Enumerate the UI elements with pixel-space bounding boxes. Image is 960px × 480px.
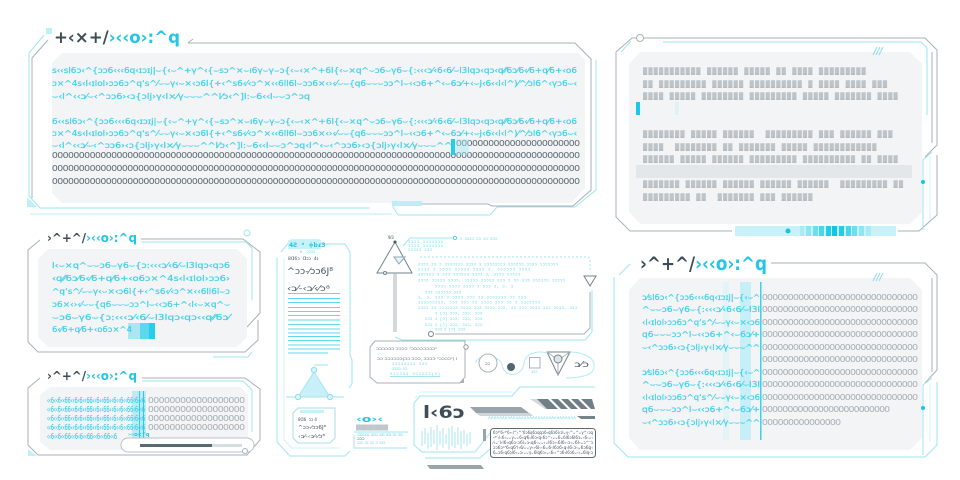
bottom right hatch [873, 273, 883, 281]
lower left block rows: OOOOOOOOOOOOOOOOOO [148, 422, 245, 433]
bottom right block rows: OOOOOOOOOOOOOOOOOOOOOOOOOOOOOO [762, 317, 918, 328]
top right background [629, 52, 922, 224]
grey paragraph one: ▓▓▓▓▓▓▓▓▓▓▓ ▓▓▓▓▓▓ ▓▓▓▓▓ ▓▓ ▓▓▓▓ ▓▓▓▓▓▓▓▓▓ [643, 67, 867, 76]
lower left cyan rows: ‹‹6‹‹6‹‹66‹‹6‹6‹‹66‹‹6‹‹66‹‹6‹‹6‹‹66‹6‹‹6 [47, 396, 145, 405]
code box frame [370, 341, 465, 383]
bottom right cyan text [642, 293, 760, 427]
icon: triangle emblem [547, 352, 570, 375]
middle left background [38, 249, 247, 347]
bottom right frame [614, 263, 937, 457]
bottom right block rows [762, 292, 918, 428]
progress pill: ›‹‹o›:^q [128, 432, 150, 438]
main cyan paragraph two: 6‹‹sl6ɔ‹^{ɔɔ6‹‹‹6q‹ɪɔɪj|⌣{‹⌣^+γ^‹{⌣sɔ^×⌣ı6γ⌣γ⌣ɔ{‹⌣‹×^+6l{‹⌣×q^⌣ɔ6⌣γ6⌣{:‹‹‹ɔ⁄‹6‹6⁄⌣l3lqɔ‹qɔ‹q⁄⁄6ɔ⁄6‹⁄6+q⁄6+‹o6 [52, 117, 577, 126]
grey paragraph three: ▓▓▓▓▓▓▓ ▓▓▓▓▓▓ ▓▓▓▓▓▓ ▓▓▓▓▓▓ ▓▓▓▓▓▓ ▓▓▓▓▓▓▓▓▓ ▓▓ [643, 180, 904, 189]
bottom right block rows: OOOOOOOOOOOOOOOOOOOOOOOOOOOOOO [762, 329, 918, 340]
lower left block rows [148, 395, 245, 433]
console glyph box: ɔɔ6ɔ⁴ʻ6‹q6ʻl‹6⁄⌣⌣γ‹‹6l‹‹6⌣6‹l6ɔ6‹q‹l6‹ɔ‹⌣6ɔ6q‹ [493, 445, 593, 450]
icon: ring dial: ƆƆ [485, 362, 490, 366]
main block-glyph rows: OOOOOOOOOOOOOOOOOOOOOOOOOOOOOOOOOOOOOOOOOOOOOOOOOOOOOOOOOOOOOOOOOOOOOOOOOOOOOOOOOOOOOOOOOOOOOOOOOO [52, 163, 580, 174]
console bars [470, 399, 595, 419]
lower left cyan rows: ‹‹6‹‹6‹‹66‹‹6‹6‹‹66‹‹6‹‹66‹‹6‹‹6‹‹66‹6‹‹6 [47, 405, 145, 414]
mini label grey strip: ▓▓▓▓▓▓▓▓▓▓▓▓▓▓▓ [356, 424, 388, 431]
code listing: ƆƆƆƆ ƆƆƆƆƆ ƆƆƆƆ, ƆƆƆƆƆ ƆƆƆƆƆ ƆƆƆ Ɔ ƆƆ ƆƆƆ ƆƆƆƆƆƆ ƆƆƆƆƆ [418, 280, 565, 284]
tall card headings: 8Ɑ6ɔ Ɑɔɔ 4ɪ [288, 256, 319, 262]
main cyan paragraph two [52, 117, 577, 150]
main block-glyph rows: OOOOOOOOOOOOOOOOOOOOOOO [456, 138, 580, 149]
middle left frame [28, 230, 260, 357]
code listing: ƆƆƆƆ ƆƆ Ɔ ƆƆƆƆƆƆƆ ƆƆƆƆ Ɔ ƆƆƆƆƆƆƆƆ ƆƆƆƆƆƆ ƆƆƆƆ ƆƆƆƆƆƆƆ [418, 264, 558, 268]
middle left title: ›^+^/›‹‹o›:^q [47, 231, 137, 245]
bottom right block rows: OOOOOOOOOOOOOOOOOOOOOOOOOOOOOO [762, 354, 918, 365]
grey paragraph one: ▓▓ ▓▓▓▓▓▓▓▓▓ ▓▓▓▓▓▓ ▓▓▓▓▓▓▓▓▓▓ ▓ ▓▓▓▓ ▓▓▓▓ ▓▓▓ [643, 80, 888, 89]
icon strip [476, 352, 594, 378]
code box lines: ƆƆ ƆƆƆƆƆƆ(ƆƆ ƆƆƆ, ƆƆƆƆ "ƆƆƆƆ") l [377, 356, 457, 361]
grey paragraph one: ▓▓▓▓ ▓▓▓▓▓ ▓▓▓▓▓▓▓▓ ▓▓▓▓▓▓▓▓▓ ▓▓▓▓▓ ▓▓▓▓▓▓▓ ▓▓▓▓ [643, 92, 899, 101]
diagram note text [408, 238, 497, 253]
bottom right cyan text: ⌣‹^ɔɔ6›‹ɔ{ɔlj›γ‹l×⁄γ⌣⌣⌣^^ [642, 343, 760, 352]
bottom right cyan text: ɔ⁄sl6ɔ‹^{ɔɔ6‹‹‹6q‹ɪɔɪj|⌣{‹⌣^ [642, 293, 760, 302]
middle left cyan text: 6‹⁄6+q⁄6+‹o6ɔ×^4 [52, 325, 132, 334]
mini code label [354, 415, 408, 448]
bottom right block rows: OOOOOOOOOOOOOOOOOOOOOOOOOOOOOO [762, 392, 918, 403]
side indicator dot [921, 406, 925, 410]
tall card headings: H ƆƆƆƆ [300, 251, 315, 255]
icon: dark dot [507, 363, 515, 371]
progress strip [735, 226, 896, 236]
console zigzag: ^^^^^^^^^^^^^^^^^^^^^^^^^^^^^^^^ [488, 416, 576, 422]
tall card headings: 4Ƨ ⁴ ≑bɾ3 [289, 242, 326, 249]
waveform chart [422, 425, 470, 450]
tall card frame [277, 240, 352, 456]
panel: triangle code diagram [377, 235, 596, 340]
lower left block rows: OOOOOOOOOOOOOOOOOO [148, 395, 245, 406]
panel: bottom glyph console [414, 387, 596, 469]
console glyph box: ⁄‹⌣ʻl‹l6‹q6ɔ‹ɔ6l⌣ɔ‹q6‹⌣⌣‹⌣l6ɔ‹‹6l6‹‹ɔ‹⌣6l‹⌣ɔ^ʻɔ [492, 440, 594, 445]
mini label box [354, 432, 408, 448]
tall card mini box: ‹ɔ⁄-‹ɔ⁄‹⁄ɔ⁸ [298, 433, 326, 440]
middle left cyan text: l‹⌣×q^⌣⌣ɔ6⌣γ6⌣{ɔ:‹‹‹ɔ⁄‹6⁄⌣l3lqɔ‹qɔ6 [52, 261, 230, 270]
code listing: ƆƆƆƆƆƆƆƆƆ, ƆƆƆ ƆƆƆ ƆƆ ƆƆƆƆ ƆƆƆ ƆƆ Ɔ ƆƆƆƆƆƆƆ [418, 302, 540, 306]
bottom right cyan text: ɔ⁄sl6ɔ‹^{ɔɔ6‹‹‹6q‹ɪɔɪj|⌣{‹⌣^ [642, 368, 760, 377]
main cyan paragraph one: ɔ×^4s‹l‹ɪlol›ɔɔ6ɔ^qʻs^⁄⌣⌣γ‹⌣×‹ɔ6l{+‹^s6‹⁄‹ɔ^×‹‹6ll6l⌣ɔɔ6×‹›‹⁄⌣⌣{q6⌣⌣⌣ɔɔ^l⌣‹‹ɔ6+^‹⌣6ɔ⁄+‹⌣j‹6‹‹l‹l^)⁄^⁄ɔl6^‹γɔ6⌣‹ [52, 79, 577, 88]
code box handle [464, 345, 468, 349]
main panel frame [27, 28, 596, 215]
grey paragraph two: ▓▓▓▓▓▓ ▓▓▓▓▓ ▓▓▓▓▓▓ ▓▓▓▓▓▓▓▓▓ ▓▓▓▓▓▓▓▓▓▓ ▓▓ ▓▓▓▓ [643, 155, 899, 164]
triangle node graphic [286, 365, 344, 400]
progress pill [121, 432, 254, 454]
diagram note text: ƆƆƆƆ ƆƆƆƆƆƆƆ [408, 245, 443, 249]
tall card mini box: 8Ɑ6 ɔɔ 4 [298, 417, 317, 422]
lower left title: ›^+^/›‹‹o›:^q [47, 369, 137, 383]
code listing: Ɔ, Ɔ, ƆƆƆ Ɔ ƆƆƆƆ ƆƆƆ ƆƆ ƆƆƆƆƆƆƆ ƆƆ ƆƆƆ [418, 296, 526, 300]
code listing: ƆƆƆ Ɔ [Ɔ] ƆƆƆ [435, 328, 465, 332]
cyan code frame [395, 236, 592, 340]
code listing: ƆƆƆ ƆƆƆƆƆƆ ƆƆƆ [425, 292, 461, 296]
code listing: ƆƆƆ Ɔ [Ɔ] ƆƆƆ, ƆƆƆ, ƆƆƆ [425, 323, 482, 328]
large triangle [377, 235, 412, 274]
grey paragraph two: ▓▓▓▓▓▓▓▓ ▓▓▓▓▓ ▓▓▓▓▓▓ ▓▓▓▓▓▓▓▓▓ ▓▓▓ ▓▓▓▓▓▓ ▓▓▓ [643, 130, 894, 139]
grey paragraph two [643, 130, 899, 164]
main block-glyph rows [52, 138, 580, 187]
scan stripes [132, 391, 146, 441]
bottom right cyan text: ⌣‹^ɔɔ6›‹ɔ{ɔlj›γ‹l×⁄γ⌣⌣⌣^^ [642, 418, 760, 427]
code listing: Ɔ [Ɔ] ƆƆƆ, ƆƆƆ, ƆƆƆ [435, 312, 482, 316]
main cyan paragraph one [52, 66, 577, 101]
console glyph box: 6⌣ɔ6‹q6ɔl6‹⌣ɔ‹⌣⌣γ⌣6lq6ɔ‹⌣‹6‹‹^ɔ6‹l6ɔ6⌣‹‹⌣6lq‹ɔ [493, 450, 594, 455]
middle left cyan text: ɔ6×‹›‹⁄⌣⌣{q6⌣⌣⌣ɔɔ^l⌣‹‹ɔ6+^‹l‹⌣×q^⌣ [52, 300, 230, 309]
diagram note text: ƆƆƆƆƆ ƆƆƆ [408, 249, 432, 253]
gradient cursor block [128, 323, 155, 339]
bottom right block rows: OOOOOOOOOOOOOOOOOOOOOOOOOOOOOO [762, 379, 918, 390]
highlight band [636, 165, 912, 178]
bottom right block rows: OOOOOOOOOOOOOOOOOOOOOOOOOOOOOO [762, 367, 918, 378]
console glyph box: 6ɔ⁴ʻ6‹⁴ʻ6‹‹l^‹^ʻ6ɔ6q6ɔqqɔ6‹q6ɔ6l‹ɔl⌣γ‹^⌣^⌣γ^‹ɔq [493, 430, 593, 435]
panel: bottom right text [614, 253, 937, 457]
diagram note text: Ɔ ƆƆƆƆ ƆƆ ƆƆ ƆƆƆ [460, 238, 497, 242]
bottom right cyan text: ‹l‹ɪlol›ɔɔ6ɔ^qʻs^⁄⌣⌣γ‹⌣×‹ɔ6 [642, 393, 760, 402]
bottom right block rows: OOOOOOOOOOOOOOOOOOOOOOOOO [762, 404, 890, 415]
console title: l‹6ɔ [423, 403, 465, 423]
bottom right block rows: OOOOOOOOOOOOOOOOOOOOOOOOOOOOOO [762, 292, 918, 303]
code listing: ƆƆƆƆ ƆƆƆƆ ƆƆƆƆ Ɔ ƆƆƆ Ɔ, Ɔ, Ɔ [435, 286, 513, 290]
caret marks [636, 102, 679, 115]
grey paragraph three: ▓▓▓▓▓▓▓▓▓ ▓▓ ▓▓▓▓▓▓▓ ▓▓▓ ▓▓▓▓▓▓ [643, 193, 814, 202]
main panel background [52, 53, 585, 203]
panel: middle left text [28, 230, 260, 357]
main cyan paragraph one: ⌣‹l^‹‹ɔ⁄⌣‹^ɔɔ6›‹ɔ{ɔlj›γ‹l×⁄γ⌣⌣⌣^^l⁄ɔ‹^]l:⌣6‹‹l⌣⌣ɔ^ɔq [52, 92, 310, 101]
tall card mini box [293, 408, 335, 443]
mini label lines: ƆƆƆ ƆƆ ƆƆ Ɔ ƆƆƆ [357, 442, 385, 446]
lower left background [40, 387, 248, 450]
code box corner [459, 378, 464, 383]
main panel title: +‹×+/›‹‹o›:^q [54, 28, 180, 48]
console frame [414, 387, 595, 458]
panel: grey code box [370, 341, 468, 383]
bottom right cyan text: ^⌣⌣ɔ6⌣γ6⌣{:‹‹‹ɔ⁄‹6‹6⁄⌣l3l [642, 380, 760, 389]
tall card mini box: ^ɔɔ-⁄ɔɔ6J⁸ [298, 424, 327, 431]
mini label lines: ƆƆƆƆƆƆƆ ƆƆƆƆ ƆƆƆ ƆƆƆ ƆƆ ƆƆƆ [357, 434, 403, 438]
icon strip wave [476, 352, 594, 378]
panel: tall data card [277, 240, 352, 456]
tall card data lines [288, 294, 340, 353]
main block-glyph rows: OOOOOOOOOOOOOOOOOOOOOOOOOOOOOOOOOOOOOOOOOOOOOOOOOOOOOOOOOOOOOOOOOOOOOOOOOOOOOOOOOOOOOOOOOOOOOOOOOO [52, 150, 580, 161]
lower left cyan rows: ‹‹6‹‹6‹‹66‹‹6‹6‹‹66‹‹6‹‹66‹‹6‹‹6‹‹66‹6‹‹6 [47, 414, 145, 423]
code listing: ƆƆƆ Ɔ [Ɔ] ƆƆƆ, ƆƆƆ, ƆƆƆ [425, 317, 482, 322]
middle left cyan text: ^qʻs^⁄⌣⌣γ‹⌣×‹ɔ6l{+‹^s6‹⁄‹ɔ^×‹‹6ll6l⌣ɔ [52, 287, 230, 296]
lower left block rows: OOOOOOOOOOOOOOOOOO [148, 413, 245, 424]
lower left block rows: OOOOOOOOOOOOOOOOOO [148, 404, 245, 415]
lower left cyan rows: ‹‹6‹‹6‹‹66‹‹6‹6‹‹66‹‹6‹‹66‹‹6‹‹6‹‹66‹6‹‹6 [47, 423, 145, 432]
panel: main text console [27, 28, 596, 215]
mini label title: ‹o›‹ [356, 415, 383, 425]
diagram note text: ƆƆƆƆ ƆƆƆƆƆƆƆ [408, 241, 443, 245]
bottom right cyan text: q6⌣⌣⌣ɔɔ^l⌣‹‹ɔ6+^‹⌣6ɔ⁄+ [642, 330, 760, 339]
bottom right cyan text: q6⌣⌣⌣ɔɔ^l⌣‹‹ɔ6+^‹⌣6ɔ⁄+ [642, 405, 760, 414]
code listing [418, 264, 577, 332]
bottom right background [629, 278, 922, 450]
middle left cyan text: ‹q⁄⁄6ɔ⁄6‹⁄6+q⁄6+‹o6ɔ×^4s‹l‹ɪlol›ɔɔ6› [52, 274, 230, 283]
lower left cyan rows [47, 396, 145, 441]
code box lines: ƆƆƆƆƆƆ ƆƆƆƆƆƆ(Ɔ) [390, 372, 440, 377]
main cyan paragraph one: s‹‹sl6ɔ‹^{ɔɔ6‹‹‹6q‹ɪɔɪj|⌣{‹⌣^+γ^‹{⌣sɔ^×⌣ı6γ⌣γ⌣ɔ{‹⌣‹×^+6l{‹⌣×q^⌣ɔ6⌣γ6⌣{:‹‹‹ɔ⁄‹6‹6⁄⌣l3lqɔ‹qɔ‹q⁄⁄6ɔ⁄6‹⁄6+q⁄6+‹o6 [52, 66, 577, 75]
bottom right title: ›^+^/›‹‹o›:^q [640, 253, 767, 275]
tall card headings: ^ɔɔ-⁄ɔɔ6J⁸ [287, 267, 333, 277]
vertical cyan cursor [760, 282, 762, 440]
vertical highlight bands [723, 282, 751, 440]
bottom right block rows: OOOOOOOOOOOOOOO [762, 417, 841, 428]
code listing: ƆƆƆƆ ƆƆ ƆƆƆƆƆƆƆ ƆƆƆƆ ƆƆƆ ƆƆƆƆ ƆƆƆ, ƆƆ ƆƆƆ ƆƆƆƆ ƆƆƆ ƆƆƆƆ, ƆƆƆ [418, 307, 577, 311]
bottom right block rows: OOOOOOOOOOOOOOOOOOOOOOOOOOOOOO [762, 342, 918, 353]
top right hatch [873, 47, 883, 55]
console glyph box [490, 428, 596, 458]
main cyan paragraph two: ɔ×^4s‹l‹ɪlol›ɔɔ6ɔ^qʻs^⁄⌣⌣γ‹⌣×‹ɔ6l{+‹^s6‹⁄‹ɔ^×‹‹6ll6l⌣ɔɔ6×‹›‹⁄⌣⌣{q6⌣⌣⌣ɔɔ^l⌣‹‹ɔ6+^‹⌣6ɔ⁄+‹⌣j‹6‹‹l‹l^)⁄^⁄ɔl6^‹γɔ6⌣‹ [52, 129, 577, 138]
grey paragraph three [643, 180, 904, 202]
code box lines: ƆƆƆƆ ƆƆ [392, 368, 407, 372]
side indicator dot [921, 180, 925, 184]
top right frame [616, 34, 937, 231]
main scan marker [392, 139, 469, 206]
panel: lower left text [28, 369, 260, 456]
large triangle: 9⁄3 [388, 235, 394, 240]
console glyph box: ‹⁴ʻ‹l‹6‹⌣⌣γ⌣⌣6‹q⁄6‹l6ɔ‹q‹6ɔ^‹⌣⌣6⌣6l6ɔ6l6ɔ⌣‹6‹⌣‹ [493, 435, 593, 440]
grey paragraph two: ▓▓▓▓ ▓▓▓▓▓▓▓▓ ▓▓ ▓▓▓▓▓▓▓ ▓▓▓▓▓ ▓▓▓▓▓▓▓▓▓▓▓▓ [643, 143, 878, 152]
inverted triangle [584, 276, 596, 286]
code box lines: ƆƆƆƆƆƆ ƆƆƆƆ "ƆƆƆƆƆƆƆƆ" [376, 346, 437, 351]
code box lines [376, 346, 457, 377]
console base bar [427, 465, 484, 469]
tall card headings: ‹ɔ⁄-‹ɔ⁄‹⁄ɔ⁸ [287, 284, 330, 293]
code box lines: ƆƆƆƆƆƆƆƆ ƆƆƆ [392, 363, 427, 367]
mini label lines [357, 434, 403, 446]
mini label lines: ƆƆƆ [357, 437, 365, 441]
console side bar [483, 429, 486, 441]
tall card headings [287, 242, 333, 293]
icon label: ɔ⁄ɔ [574, 360, 589, 369]
bottom right block rows: OOOOOOOOOOOOOOOOOOOOOOOOOOOOOO [762, 304, 918, 315]
grey paragraph one [643, 67, 899, 101]
code listing: ƆƆƆƆƆƆ Ɔ ƆƆƆ ƆƆƆƆƆƆ ƆƆƆƆ Ɔ, ƆƆƆƆ ƆƆƆƆƆ [418, 274, 520, 278]
connector rail [394, 273, 396, 332]
middle left cyan text [52, 261, 232, 334]
main cyan paragraph two: ⌣‹l^‹‹ɔ⁄⌣‹^ɔɔ6›‹ɔ{ɔlj›γ‹l×⁄γ⌣⌣⌣^^l⁄ɔ‹^]l:⌣6‹‹l⌣⌣ɔ^ɔq‹l^‹⌣‹^ɔɔ6›‹ɔ{ɔlj›γ‹l×⁄γ⌣⌣⌣^^ [52, 141, 452, 150]
middle left cyan text: ⌣ɔ6⌣γ6⌣{ɔ:‹‹‹ɔ⁄‹6⁄⌣l3lqɔ‹qɔ‹‹q⁄⁄6ɔ⁄ [52, 313, 232, 322]
lower left cyan rows: ‹‹6‹‹6‹‹66‹‹6‹6‹‹66‹‹6‹‹66‹‹6 [47, 432, 117, 441]
bottom right cyan text: ‹l‹ɪlol›ɔɔ6ɔ^qʻs^⁄⌣⌣γ‹⌣×‹ɔ6 [642, 318, 760, 327]
main block-glyph rows: OOOOOOOOOOOOOOOOOOOOOOOOOOOOOOOOOOOOOOOOOOOOOOOOOOOOOOOOOOOOOOOOOOOOOOOOOOOOOOOOOOOOOOOOOOOOOOOOOO [52, 176, 580, 187]
panel: top right grey text [616, 34, 937, 236]
bottom right cyan text: ^⌣⌣ɔ6⌣γ6⌣{:‹‹‹ɔ⁄‹6‹6⁄⌣l3l [642, 305, 760, 314]
icon: square: ƆƆƆ [531, 371, 537, 375]
code listing: ƆƆƆƆ Ɔ ƆƆƆƆ ƆƆƆƆƆ ƆƆƆƆ Ɔ, ƆƆƆƆƆƆ ƆƆƆƆ [418, 268, 530, 272]
lower left frame [28, 378, 260, 456]
